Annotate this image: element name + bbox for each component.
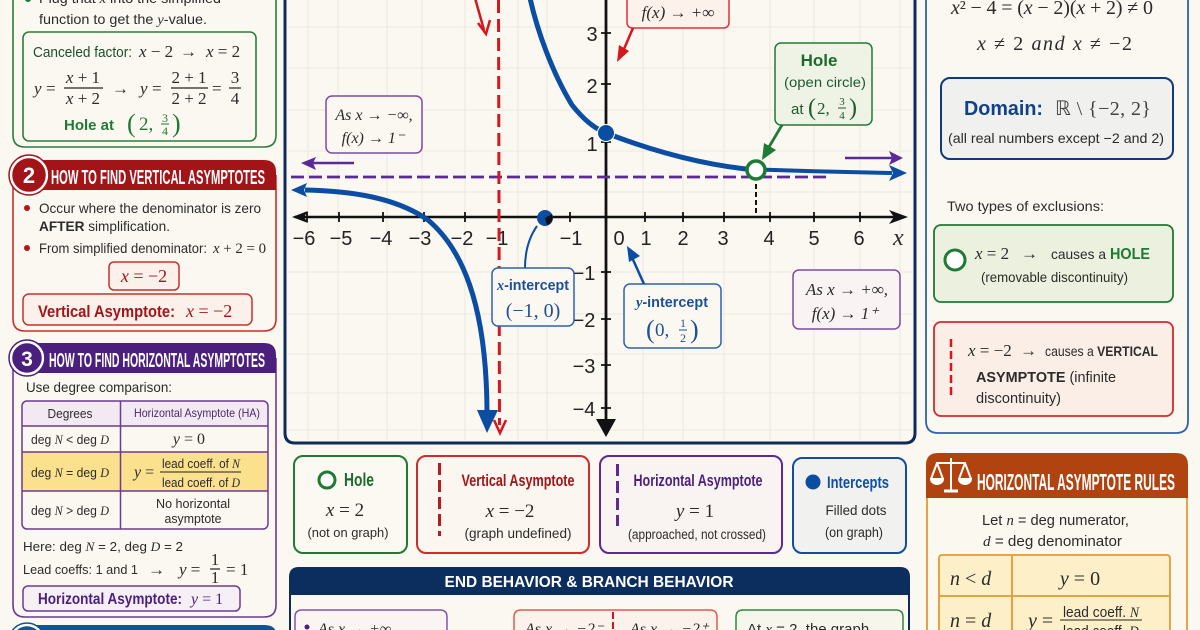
callout: hole calculation: y [32,79,42,98]
callout: right end behavior: f(x) → 1⁺ [812,304,880,323]
table: degree rules: lead coeff. N [1063,604,1140,621]
legend: vertical asymptote: (graph undefined) [464,526,572,541]
text: use degree comparison: Use degree comparison: [26,379,172,395]
axis labels: −2 [451,228,473,250]
table: degree comparison: deg N > deg D [31,503,110,518]
card: hole exclusion: → [1021,244,1038,263]
card: hole exclusion [934,225,1173,302]
header: how to find vertical asymptotes: HOW TO FIND VERTICAL ASYMPTOTES [51,167,265,189]
axis labels: 6 [853,228,865,250]
legend: hole: Hole [344,470,374,490]
vertical asymptote line [494,0,506,433]
axis labels: x [892,225,904,251]
card: hole behavior [736,610,903,630]
point: open circle hole [747,161,765,179]
table: degree comparison: asymptote [164,511,222,526]
legend: intercepts: Filled dots [826,502,886,518]
table: degree comparison [22,401,268,529]
axis labels: −1 [486,228,508,250]
axis labels: −1 [573,263,595,285]
callout: plus infinity: f(x) → +∞ [642,3,714,22]
bullet list: Occur where the denominator is zero [39,200,261,216]
callout: y-intercept: ( [646,315,655,344]
table: degree comparison: lead coeff. of N [162,456,241,471]
point: x-intercept [537,210,553,226]
card: vertical asymptote exclusion: causes a VERTICAL [1045,344,1158,359]
legend: horizontal asymptote: (approached, not crossed) [628,527,766,542]
callout: horizontal asymptote result: Horizontal Asymptote: [38,591,182,608]
dashed drop from hole [755,184,757,217]
callout: hole: (open circle) [784,74,866,90]
axis labels: 1 [640,228,652,250]
callout: left end behavior: As x → −∞, [334,107,413,124]
header: horizontal asymptote rules [926,453,1188,498]
card: hole exclusion: x = 2 [974,244,1009,263]
callout: y-intercept: y-intercept [634,294,708,311]
legend: intercepts: Intercepts [827,473,889,492]
text: step 1 bullet: function to get the y-value. [39,11,207,28]
text: domain derivation [950,0,1153,55]
arrow: hole callout [762,125,782,160]
axis labels: −6 [293,228,315,250]
text: worked example: Lead coeffs: 1 and 1 [23,563,138,577]
callout: hole calculation: 3 [162,111,168,125]
panel: graph [285,0,915,443]
callout: hole calculation: ( [127,109,136,138]
legend: hole: (not on graph) [308,525,388,540]
callout: x equals minus 2: x = −2 [120,266,167,286]
callout: hole calculation: 4 [231,89,240,108]
card: vertical asymptote exclusion [934,322,1173,416]
callout: horizontal asymptote result: y = 1 [189,591,223,608]
table: degree rules: y = 0 [1058,568,1100,590]
legend: horizontal asymptote [600,456,782,553]
legend: horizontal asymptote: Horizontal Asymptote [634,471,762,490]
callout: hole: ) [849,95,857,121]
header: how to find horizontal asymptotes: 3 [21,348,33,371]
arrow: right end behavior [845,151,903,165]
axis labels: −2 [573,310,595,332]
header: end behavior [289,567,910,595]
table: degree comparison: lead coeff. of D [162,475,241,490]
table: degree rules [939,555,1170,630]
table: degree comparison: deg N < deg D [31,432,110,447]
axis labels: −4 [370,228,392,250]
callout: hole calculation: Canceled factor: [33,44,132,61]
callout: hole calculation: 2 + 2 [171,89,207,108]
card: vertical asymptote exclusion: x = −2 [967,341,1012,360]
header: how to find horizontal asymptotes: HOW TO FIND HORIZONTAL ASYMPTOTES [49,350,265,372]
callout: hole calculation: ) [172,109,181,138]
connector: x-intercept callout [525,226,537,268]
panel: step 3 horizontal asymptotes [9,340,276,617]
card: infinity behavior [295,610,447,630]
legend: intercepts: (on graph) [825,525,883,540]
callout: hole calculation: → [112,79,129,98]
callout: domain result: ℝ \ {−2, 2} [1055,98,1151,120]
callout: vertical asymptote result [23,294,252,325]
bullet list: x + 2 = 0 [212,241,266,257]
text: let n and d [982,512,1129,550]
icon: balance scale [931,458,971,491]
callout: hole [775,43,872,125]
callout: hole calculation: 4 [162,124,168,138]
legend: hole [294,456,407,553]
table: degree comparison: Degrees [48,406,93,421]
callout: hole: 3 [839,96,845,108]
callout: hole calculation: 3 [231,68,239,87]
table: degree comparison: y = [132,464,154,481]
axis labels: −3 [573,356,595,378]
callout: y-intercept [624,284,721,348]
callout: hole calculation: y [138,79,148,98]
card: hole exclusion: HOLE [1110,246,1150,263]
bullet list: From simplified denominator: [39,240,207,256]
callout: y-intercept: 2 [680,331,686,345]
arrow: y-intercept callout [627,246,644,284]
panel: domain [926,0,1188,433]
legend: vertical asymptote: Vertical Asymptote [462,471,574,490]
axis labels: 5 [808,228,820,250]
callout: hole calculation [23,32,256,141]
legend: vertical asymptote [417,456,589,553]
axis labels: 3 [586,24,598,46]
panel: end behavior and branch behavior [289,567,910,630]
text: step 1 bullet [25,0,221,28]
callout: x-intercept: (−1, 0) [506,300,560,322]
callout: left end behavior: f(x) → 1⁻ [342,130,406,147]
header: how to find horizontal asymptotes [9,340,276,376]
text: let n and d: d = deg denominator [983,533,1122,550]
callout: hole calculation: x − 2 [138,42,173,61]
callout: x-intercept: x-intercept [496,277,569,294]
callout: plus infinity [627,0,729,28]
panel: step 2 vertical asymptotes [9,155,276,331]
axis labels: −5 [330,228,352,250]
callout: hole calculation: Hole at [64,117,114,134]
legend: hole: x = 2 [325,500,364,521]
axis labels: 2 [586,76,598,98]
callout: hole: ( [808,95,816,121]
curve: right branch [530,0,907,181]
callout: hole calculation: 2, [139,114,153,135]
axis labels: −4 [573,399,595,421]
panel: step 4 header [9,623,276,630]
callout: hole calculation: x = 2 [205,42,240,61]
callout: x equals minus 2 [109,262,179,290]
arrow: callout to vertical asymptote [475,0,490,34]
text: worked example: → [148,560,165,579]
axis labels: 3 [717,228,729,250]
axis labels: −1 [560,228,582,250]
text: two types of exclusions: Two types of exclusions: [947,198,1104,214]
bullet list: AFTER simplification. [39,218,170,234]
text: worked example: 1 [211,550,219,569]
panel: step 1 find holes [13,0,276,147]
text: let n and d: Let n = deg numerator, [982,512,1129,529]
text: domain derivation: x ≠ 2 and x ≠ −2 [976,33,1132,55]
callout: x-intercept [492,268,574,326]
axis labels: 2 [677,228,689,250]
callout: hole: 4 [839,110,845,122]
table: degree comparison: y = 0 [171,431,205,448]
callout: hole calculation: 2 + 1 [171,68,207,87]
callout: y-intercept: 0, [655,320,669,341]
axis labels [293,24,904,421]
callout: y-intercept: 1 [680,316,686,330]
legend: intercepts [793,458,906,553]
table: degree comparison: Horizontal Asymptote (HA) [134,406,260,420]
axis labels: 4 [763,228,775,250]
callout: hole calculation: x + 2 [65,89,100,108]
header: how to find vertical asymptotes: 2 [23,163,35,188]
legend: vertical asymptote: x = −2 [485,501,534,522]
arrow: left end behavior [301,157,354,170]
callout: horizontal asymptote result [23,586,240,611]
callout: domain result: Domain: [964,98,1043,120]
panel: horizontal asymptote rules [926,453,1188,630]
legend: horizontal asymptote: y = 1 [674,501,714,522]
callout: vertical asymptote result: x = −2 [185,301,232,321]
callout: hole calculation: → [180,42,197,61]
callout: hole: 2, [817,99,830,118]
horizontal asymptote line [291,176,826,178]
text: worked example: y = [177,560,200,579]
card: hole exclusion: causes a [1051,246,1106,262]
card: hole exclusion: (removable discontinuity) [981,270,1128,285]
callout: hole calculation: = [212,79,222,98]
arrow: callout to right branch [617,28,633,62]
callout: left end behavior [326,96,422,153]
callout: domain result: (all real numbers except −2 and 2) [948,130,1164,146]
table: degree comparison: No horizontal [156,496,230,511]
callout: domain result [941,78,1173,159]
callout: hole calculation: = [152,79,162,98]
axis labels: 0 [613,228,625,250]
header: end behavior: END BEHAVIOR & BRANCH BEHAVIOR [444,574,734,591]
axes [292,0,908,437]
text: worked example: 1 [211,568,219,587]
card: vertical asymptote exclusion: discontinuity) [976,391,1061,407]
callout: vertical asymptote result: Vertical Asymptote: [38,302,175,321]
callout: right end behavior [793,270,900,329]
card: asymptote behavior [514,610,717,630]
text: worked example [23,540,248,587]
card: vertical asymptote exclusion: → [1020,341,1037,360]
callout: hole: at [791,101,804,118]
table: degree comparison: deg N = deg D [31,465,110,480]
callout: y-intercept: ) [690,315,699,344]
axis labels: 1 [586,134,598,156]
card: vertical asymptote exclusion: ASYMPTOTE (infinite [976,370,1116,386]
callout: hole calculation: x + 1 [65,68,100,87]
table: degree rules: n < d [950,568,992,590]
header: how to find vertical asymptotes [9,155,276,195]
text: worked example: Here: deg N = 2, deg D = 2 [23,540,183,554]
callout: hole: Hole [801,51,837,70]
text: worked example: = 1 [226,560,248,579]
point: y-axis crossing [598,124,614,142]
callout: right end behavior: As x → +∞, [805,280,888,299]
callout: hole calculation: = [46,79,56,98]
bullet list [24,200,266,257]
curve: left branch [291,183,498,433]
axis labels: −3 [409,228,431,250]
